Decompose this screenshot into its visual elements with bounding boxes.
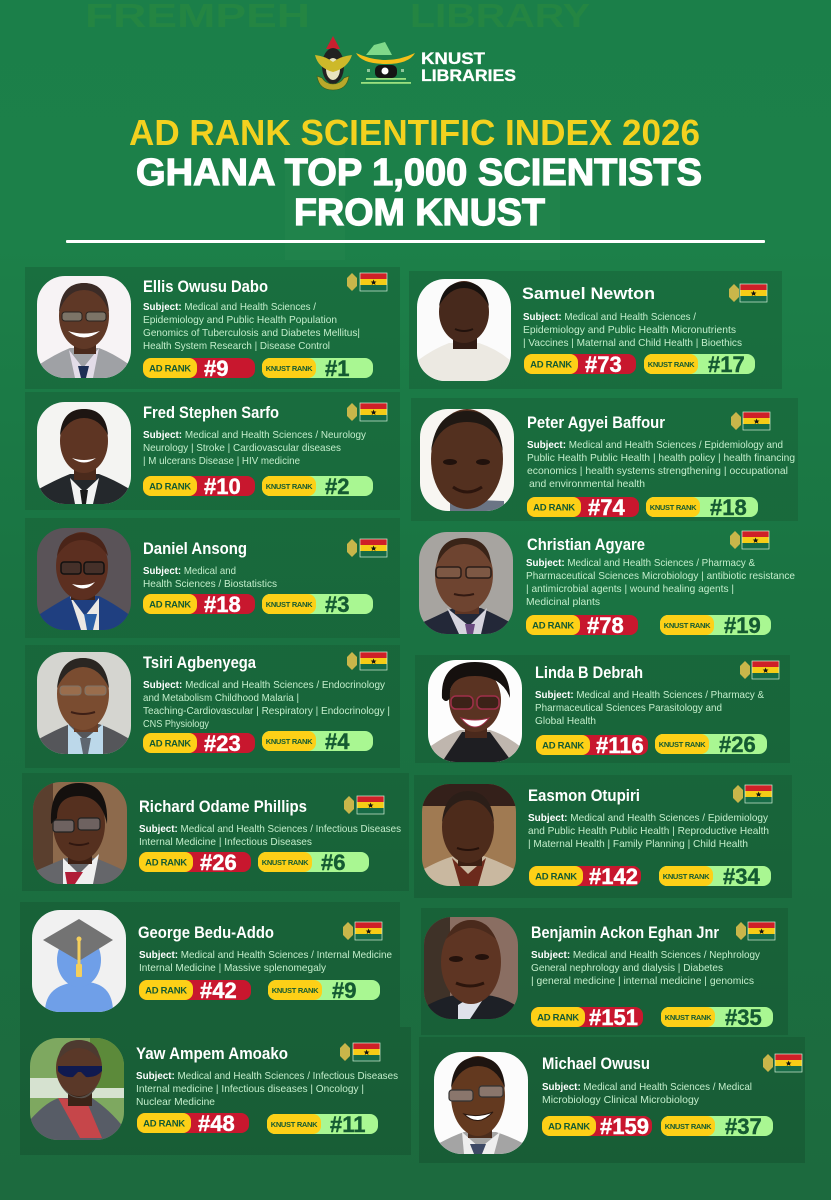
ad rank pill: #26 [200, 850, 237, 875]
subject text: CNS Physiology [143, 718, 210, 730]
knust rank pill: #11 [330, 1112, 366, 1137]
subject text: and Public Health Public Health | Reproductive Health [528, 825, 769, 837]
photo: Richard Odame Phillips [33, 782, 127, 884]
knust rank pill: KNUST RANK [650, 503, 697, 512]
ad rank pill [143, 592, 255, 617]
panel: Michael Owusu [419, 1037, 805, 1163]
subject text: | Vaccines | Maternal and Child Health | Bioethics [523, 337, 742, 349]
knust rank pill: #2 [325, 474, 349, 499]
icon: crest and Ghana flag [347, 403, 387, 421]
knust rank pill [661, 1005, 773, 1030]
subject text: Medicinal plants [526, 596, 600, 608]
subject text: Internal Medicine | Massive splenomegaly [139, 962, 327, 974]
knust rank pill: KNUST RANK [271, 1120, 318, 1129]
subject text: Global Health [535, 715, 596, 727]
icon: crest and Ghana flag [730, 531, 769, 549]
panel: George Bedu-Addo: George Bedu-Addo [138, 924, 274, 942]
knust rank pill: #35 [725, 1005, 762, 1030]
ad rank pill [139, 978, 251, 1003]
icon: crest and Ghana flag [733, 785, 772, 803]
title: GHANA TOP 1,000 SCIENTISTS [136, 152, 702, 194]
subject text: Subject: Medical and Health Sciences / Neurology [143, 429, 367, 441]
icon: crest and Ghana flag [343, 922, 382, 940]
subject text: Neurology | Stroke | Cardiovascular diseases [143, 442, 341, 454]
icon: crest and Ghana flag [347, 273, 387, 291]
photo: Samuel Newton [417, 279, 511, 381]
ad rank pill: AD RANK [143, 1118, 185, 1130]
knust rank pill [268, 978, 380, 1003]
panel: Peter Agyei Baffour [411, 398, 798, 521]
knust rank pill [262, 356, 373, 381]
logo wordmark: KNUST [421, 49, 486, 68]
panel: Christian Agyare [419, 531, 795, 638]
photo: Daniel Ansong [37, 528, 131, 630]
ad rank pill: AD RANK [548, 1122, 590, 1132]
subject text: Health System Research | Disease Control [143, 340, 330, 352]
subject text [136, 1070, 398, 1108]
icon: crest and Ghana flag [344, 796, 384, 814]
subject text: Health Sciences / Biostatistics [143, 578, 277, 590]
subject text: Nuclear Medicine [136, 1096, 215, 1108]
knust rank pill [262, 474, 373, 499]
knust rank pill: #17 [708, 352, 745, 377]
icon: crest and Ghana flag [347, 539, 387, 557]
panel: Ellis Owusu Dabo [25, 267, 400, 389]
subject text [527, 439, 795, 490]
subject text: and Metabolism Childhood Malaria | [143, 692, 299, 704]
subject text: Subject: Medical and Health Sciences / Medical [542, 1081, 752, 1093]
ad rank pill [137, 1111, 249, 1136]
subject text [139, 949, 392, 974]
subject text: Subject: Medical and [143, 565, 236, 577]
ad rank pill: #151 [589, 1005, 638, 1030]
panel: Easmon Otupiri: Easmon Otupiri [528, 787, 640, 805]
subject text: and environmental health [529, 478, 645, 490]
ad rank pill [529, 864, 641, 889]
knust rank pill [262, 729, 373, 754]
knust rank pill [258, 850, 369, 875]
ad rank pill: AD RANK [542, 740, 584, 752]
subject text: Subject: Medical and Health Sciences / Epidemiology and [527, 439, 783, 451]
photo: Peter Agyei Baffour [420, 409, 514, 511]
knust rank pill: #19 [724, 613, 761, 638]
icon: crest and Ghana flag [736, 922, 775, 940]
knust rank pill [646, 495, 758, 520]
subject text: Subject: Medical and Health Sciences / Pharmacy & [535, 689, 764, 701]
ad rank pill: AD RANK [537, 1012, 579, 1024]
ad rank pill [526, 613, 638, 638]
ad rank pill [139, 850, 251, 875]
ad rank pill [542, 1114, 652, 1139]
subject text [143, 429, 367, 467]
subject text: | M ulcerans Disease | HIV medicine [143, 455, 300, 467]
knust rank pill: #3 [325, 592, 349, 617]
ad rank pill: #159 [600, 1114, 649, 1139]
ad rank pill: #78 [587, 613, 624, 638]
panel: Benjamin Ackon Eghan Jnr: Benjamin Ackon Eghan Jnr [531, 924, 720, 942]
ad rank pill: AD RANK [535, 872, 577, 882]
knust rank pill: #1 [325, 356, 349, 381]
panel: Michael Owusu: Michael Owusu [542, 1055, 650, 1073]
subject text: Subject: Medical and Health Sciences / Pharmacy & [526, 557, 755, 569]
subject text: Pharmaceutical Sciences Microbiology | antibiotic resistance [526, 570, 795, 582]
knust rank pill [644, 352, 755, 377]
knust rank pill [659, 864, 771, 889]
panel: Richard Odame Phillips: Richard Odame Phillips [139, 798, 307, 816]
ad rank pill: #18 [204, 592, 241, 617]
knust rank pill: #6 [321, 850, 345, 875]
subject text: Pharmaceutical Sciences Parasitology and [535, 702, 722, 714]
knust rank pill: KNUST RANK [266, 482, 313, 491]
subject text: Subject: Medical and Health Sciences / Infectious Diseases [139, 823, 401, 835]
subject text: Internal medicine | Infectious diseases | Oncology | [136, 1083, 364, 1095]
panel: Fred Stephen Sarfo: Fred Stephen Sarfo [143, 404, 279, 422]
panel: Tsiri Agbenyega [25, 645, 400, 768]
subject text [143, 565, 277, 590]
subject text: Subject: Medical and Health Sciences / [143, 301, 316, 313]
icon: crest and Ghana flag [763, 1054, 802, 1072]
panel: Linda B Debrah: Linda B Debrah [535, 664, 643, 682]
photo: Benjamin Ackon Eghan Jnr [424, 917, 518, 1019]
title: FROM KNUST [294, 192, 545, 234]
faded library sign [85, 0, 590, 34]
knust rank pill: #4 [325, 729, 350, 754]
ad rank pill [524, 352, 636, 377]
panel: Tsiri Agbenyega: Tsiri Agbenyega [143, 654, 257, 672]
logo wordmark: LIBRARIES [421, 66, 516, 85]
ad rank pill [536, 733, 648, 758]
ad rank pill [531, 1005, 643, 1030]
ad rank pill: #74 [588, 495, 625, 520]
photo: Yaw Ampem Amoako [30, 1038, 124, 1140]
ad rank pill: #9 [204, 356, 228, 381]
knust rank pill [660, 613, 771, 638]
knust rank pill: KNUST RANK [266, 600, 313, 609]
panel: Richard Odame Phillips [22, 773, 409, 891]
knust rank pill: KNUST RANK [665, 1122, 712, 1131]
ad rank pill: #73 [585, 352, 622, 377]
knust rank pill: #26 [719, 732, 756, 757]
photo: Fred Stephen Sarfo [37, 402, 131, 504]
panel: Christian Agyare: Christian Agyare [527, 536, 645, 554]
ad rank pill: #48 [198, 1111, 235, 1136]
panel: Daniel Ansong [25, 518, 400, 638]
panel: Fred Stephen Sarfo [25, 392, 400, 510]
knust rank pill: KNUST RANK [664, 621, 711, 630]
ad rank pill [143, 356, 255, 381]
ad rank pill [527, 495, 639, 520]
subject text [143, 679, 390, 730]
logo wordmark [421, 49, 516, 85]
icon: crest and Ghana flag [347, 652, 387, 670]
knust rank pill: #34 [723, 864, 760, 889]
knust rank pill: KNUST RANK [659, 740, 706, 749]
subject text: economics | health systems strengthening | occupational [527, 465, 788, 477]
photo: Tsiri Agbenyega [37, 652, 131, 754]
panel: Ellis Owusu Dabo: Ellis Owusu Dabo [143, 278, 268, 296]
ad rank pill: AD RANK [145, 986, 187, 996]
ad rank pill: AD RANK [532, 620, 574, 632]
subject text: Subject: Medical and Health Sciences / Nephrology [531, 949, 761, 961]
panel: Easmon Otupiri [414, 775, 792, 898]
ad rank pill: #116 [596, 733, 644, 758]
ad rank pill: #142 [589, 864, 638, 889]
panel: Yaw Ampem Amoako: Yaw Ampem Amoako [136, 1045, 288, 1063]
title: AD RANK SCIENTIFIC INDEX 2026 [129, 112, 700, 153]
knust rank pill: KNUST RANK [648, 360, 695, 369]
subject text: General nephrology and dialysis | Diabetes [531, 962, 723, 974]
knust rank pill: #37 [725, 1114, 762, 1139]
subject text: Microbiology Clinical Microbiology [542, 1094, 700, 1106]
photo: Linda B Debrah [428, 660, 522, 762]
knust rank pill: #18 [710, 495, 747, 520]
subject text: Subject: Medical and Health Sciences / Infectious Diseases [136, 1070, 398, 1082]
subject text [542, 1081, 752, 1106]
panel: Benjamin Ackon Eghan Jnr [421, 908, 788, 1035]
photo: Michael Owusu [434, 1052, 528, 1154]
icon: crest and Ghana flag [729, 284, 767, 302]
knust rank pill [262, 592, 373, 617]
knust rank pill [661, 1114, 773, 1139]
knust rank pill: KNUST RANK [665, 1013, 712, 1022]
icon: crest and Ghana flag [731, 412, 770, 430]
panel: Yaw Ampem Amoako [20, 1027, 411, 1155]
subject text: Internal Medicine | Infectious Diseases [139, 836, 312, 848]
subject text: Epidemiology and Public Health Population [143, 314, 337, 326]
subject text: Subject: Medical and Health Sciences / [523, 311, 696, 323]
subject text: | Maternal Health | Family Planning | Child Health [528, 838, 748, 850]
knust rank pill [655, 732, 767, 757]
knust rank pill: KNUST RANK [262, 858, 309, 867]
panel: Samuel Newton: Samuel Newton [522, 285, 655, 303]
ad rank pill: #42 [200, 978, 237, 1003]
ad rank pill: AD RANK [149, 364, 191, 374]
subject text: | antimicrobial agents | wound healing agents | [526, 583, 734, 595]
icon: crest and Ghana flag [740, 661, 779, 679]
panel: Samuel Newton [409, 271, 782, 389]
icon: crest and Ghana flag [340, 1043, 380, 1061]
subject text: Subject: Medical and Health Sciences / Endocrinology [143, 679, 386, 691]
subject text: | general medicine | internal medicine | genomics [531, 975, 754, 987]
subject text: Subject: Medical and Health Sciences / Internal Medicine [139, 949, 392, 961]
panel: George Bedu-Addo [20, 902, 400, 1027]
ad rank pill [143, 731, 255, 756]
photo: Easmon Otupiri [422, 784, 516, 886]
panel: Peter Agyei Baffour: Peter Agyei Baffour [527, 414, 666, 432]
ad rank pill: AD RANK [145, 858, 187, 868]
ad rank pill: AD RANK [149, 738, 191, 750]
logo: KNUST Libraries [315, 36, 516, 90]
knust rank pill: KNUST RANK [663, 872, 710, 881]
photo: George Bedu-Addo placeholder [32, 910, 126, 1012]
subject text [526, 557, 795, 608]
subject text: Genomics of Tuberculosis and Diabetes Mellitus| [143, 327, 360, 339]
subject text: Epidemiology and Public Health Micronutrients [523, 324, 736, 336]
subject text: Subject: Medical and Health Sciences / Epidemiology [528, 812, 769, 824]
knust rank pill: #9 [332, 978, 356, 1003]
subject text [531, 949, 761, 987]
ad rank pill: #10 [204, 474, 241, 499]
ad rank pill: AD RANK [149, 600, 191, 610]
photo: Ellis Owusu Dabo [37, 276, 131, 378]
panel: Daniel Ansong: Daniel Ansong [143, 540, 247, 558]
knust rank pill: KNUST RANK [272, 986, 319, 995]
ad rank pill [143, 474, 255, 499]
ad rank pill: AD RANK [149, 482, 191, 492]
knust rank pill [267, 1112, 378, 1137]
title [129, 112, 702, 234]
subject text [523, 311, 742, 349]
ad rank pill: #23 [204, 731, 241, 756]
ad rank pill: AD RANK [530, 360, 572, 370]
subject text [535, 689, 764, 727]
knust rank pill: KNUST RANK [266, 364, 313, 373]
subject text [139, 823, 401, 848]
icon: library stool [356, 42, 415, 84]
panel: Linda B Debrah [415, 655, 790, 763]
knust rank pill: KNUST RANK [266, 737, 313, 746]
subject text [528, 812, 769, 850]
subject text: Public Health Public Health | health policy | health financing [527, 452, 795, 464]
photo: Christian Agyare [419, 532, 513, 634]
subject text [143, 301, 360, 352]
icon: KNUST crest [315, 36, 352, 90]
ad rank pill: AD RANK [533, 502, 575, 514]
subject text: Teaching-Cardiovascular | Respiratory | Endocrinology | [143, 705, 390, 717]
